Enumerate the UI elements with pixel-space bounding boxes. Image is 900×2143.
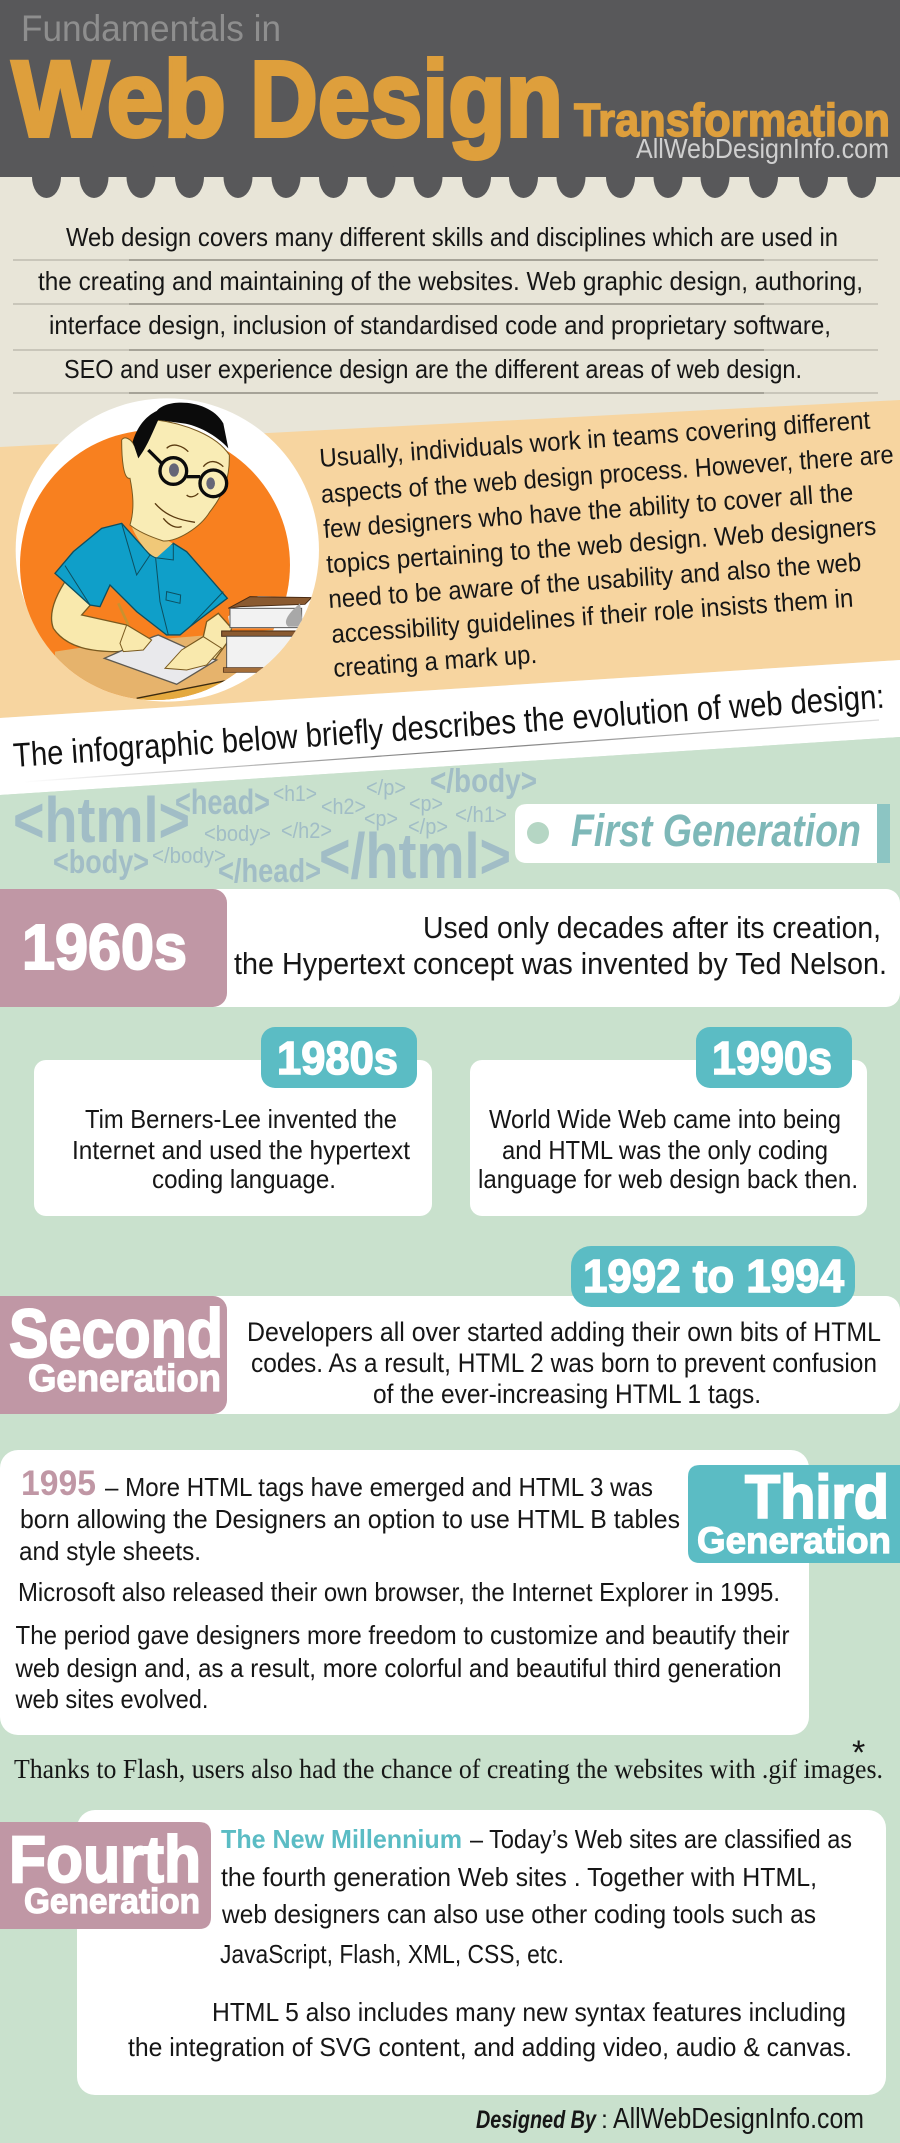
tag cloud: html tags: </head> [218,852,321,889]
credit: designed by: AllWebDesignInfo.com [613,2103,864,2135]
panel: Second Generation: Generation [28,1358,221,1400]
panel: Fourth Generation: JavaScript, Flash, XML, CSS, etc. [220,1939,564,1969]
tag cloud: html tags: <p> [409,791,443,816]
panel: 1980s: 1980s [277,1032,398,1084]
books [222,596,312,672]
icon: designer illustration [16,398,319,705]
panel: Fourth Generation: web designers can also use other coding tools such as [221,1899,816,1929]
panel: Fourth Generation: HTML 5 also includes many new syntax features including [212,1997,846,2027]
panel: 1980s: Internet and used the hypertext [72,1135,411,1165]
notebook [104,635,217,684]
tag cloud: html tags: <h1> [273,781,317,806]
panel: Fourth Generation: Fourth [9,1822,201,1896]
pencil [118,603,128,625]
tag cloud: html tags: </h2> [281,818,332,843]
panel: Third Generation: and style sheets. [19,1536,201,1566]
title: Web Design: Design [250,38,563,159]
tag cloud: html tags: <body> [204,821,271,846]
credit: designed by: : [601,2106,608,2134]
intro text block: SEO and user experience design are the different areas of web design. [64,354,802,384]
panel: 1990s: World Wide Web came into being [489,1104,841,1134]
panel: 1980s: coding language. [152,1164,336,1194]
panel: 1980s: Tim Berners-Lee invented the [85,1104,397,1134]
panel: 1990s: and HTML was the only coding [502,1135,828,1165]
tag cloud: html tags [13,762,537,892]
tag cloud: html tags: </p> [408,814,448,839]
panel: 1960s [0,889,900,1007]
title: Transformation: Transformation [574,94,890,146]
panel: 1990s: 1990s [712,1032,832,1084]
panel: Fourth Generation [0,1810,886,2095]
panel: Third Generation: – More HTML tags have emerged and HTML 3 was [105,1472,653,1502]
credit: designed by: Designed By [476,2106,597,2134]
shirt [55,523,227,635]
tag cloud: html tags: <h2> [321,794,366,819]
panel: orange intro band [0,400,900,718]
panel: Second Generation [0,1246,900,1414]
badge: 1992 to 1994: 1992 to 1994 [583,1250,844,1302]
text: Flash note: Thanks to Flash, users also had the chance of creating the websites with .gif images. [14,1754,883,1784]
panel: Fourth Generation: – Today’s Web sites are classified as [470,1824,852,1854]
intro text block [13,222,878,394]
panel: Fourth Generation: The New Millennium [221,1824,462,1854]
panel: Third Generation [0,1450,900,1735]
panel: Second Generation: Second [9,1295,223,1372]
intro text block: interface design, inclusion of standardised code and proprietary software, [49,310,831,340]
text block: slanted paragraph: Usually, individuals work in teams covering different [318,405,872,473]
panel: green background [0,737,900,2143]
tag cloud: html tags: <body> [53,843,149,880]
text block: slanted paragraph: need to be aware of the usability and also the web [327,547,862,614]
panel: Fourth Generation: Generation [24,1882,200,1921]
panel: 1990s [470,1027,867,1216]
panel: Third Generation: The period gave designers more freedom to customize and beautify their [16,1620,790,1650]
title: Web Design: Web [12,38,226,159]
panel: Fourth Generation: the fourth generation Web sites . Together with HTML, [221,1862,817,1892]
badge: Third Generation: Third [745,1463,889,1531]
intro text block: the creating and maintaining of the websites. Web graphic design, authoring, [38,266,863,296]
hair [133,403,228,458]
tag cloud: html tags: </h1> [455,802,507,827]
hand on notebook [165,637,222,670]
title: Fundamentals in: Fundamentals in [21,8,281,49]
text block: slanted paragraph: accessibility guidelines if their role insists them in [330,583,854,649]
tag cloud: html tags: <p> [364,806,398,831]
panel: Third Generation: web design and, as a result, more colorful and beautiful third generation [15,1653,782,1683]
panel: Third Generation: Microsoft also released their own browser, the Internet Explorer in 1995. [18,1577,780,1607]
face and neck [132,527,173,558]
left arm [51,577,152,652]
panel: 1980s [34,1027,432,1216]
title: Web Design [12,38,563,159]
collar and shirt details [65,523,223,635]
glasses [148,450,227,497]
text block: slanted paragraph [318,405,895,683]
panel: Third Generation: 1995 [21,1464,96,1503]
header banner [0,0,900,198]
panel: 1960s: 1960s [22,911,187,983]
credit: designed by [476,2103,864,2135]
badge: Third Generation: Generation [697,1520,891,1561]
panel: Second Generation: of the ever-increasing HTML 1 tags. [373,1379,761,1409]
text: Flash note: * [852,1734,865,1772]
brows, nose and mouth [155,445,223,527]
tag cloud: html tags: </html> [319,820,511,892]
tag cloud: html tags: </body> [152,843,226,868]
panel: white banner band [0,660,900,795]
text: Flash note [14,1734,883,1784]
tag cloud: html tags: </p> [366,775,406,800]
text block: slanted paragraph: creating a mark up. [332,639,538,683]
right arm [165,613,232,670]
tag cloud: html tags: <html> [13,784,190,856]
text block: slanted paragraph: topics pertaining to the web design. Web designers [325,511,877,579]
text block: slanted paragraph: few designers who have the ability to cover all the [322,477,854,544]
panel: Third Generation: web sites evolved. [15,1684,208,1714]
tag cloud: html tags: </body> [430,762,537,799]
panel: Fourth Generation: the integration of SVG content, and adding video, audio & canvas. [128,2032,852,2062]
intro text block: Web design covers many different skills and disciplines which are used in [66,222,838,252]
panel: 1990s: language for web design back then. [478,1164,858,1194]
panel: Third Generation: born allowing the Designers an option to use HTML B tables [20,1504,680,1534]
badge: Third Generation [688,1463,900,1563]
tag cloud: html tags: <head> [175,783,270,822]
